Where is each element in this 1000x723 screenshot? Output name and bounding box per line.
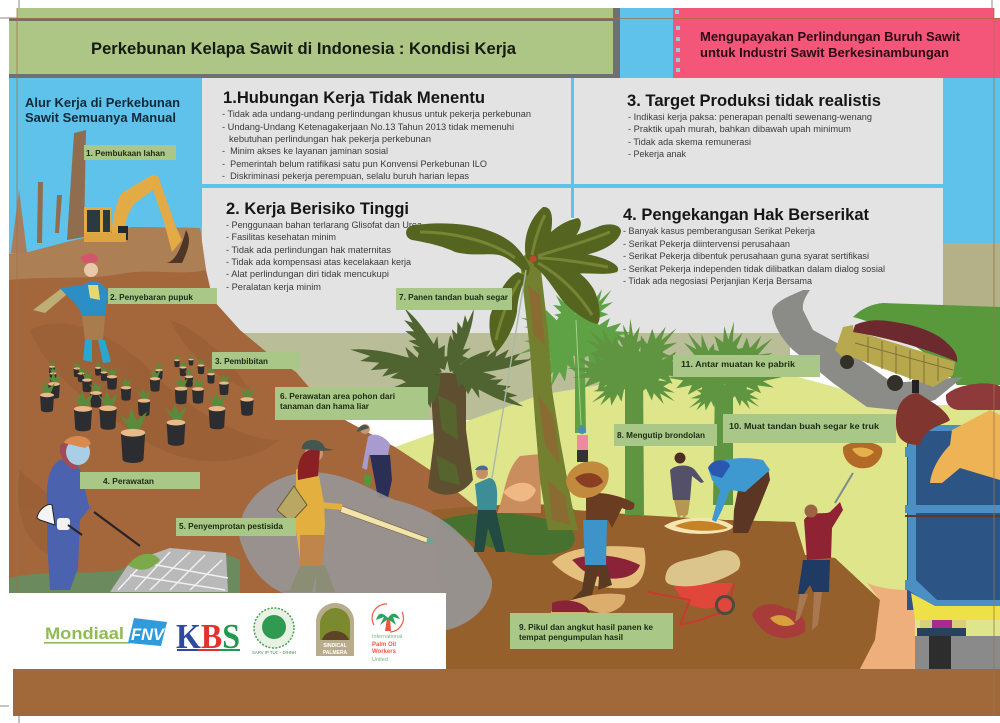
logo: union emblem: SARV IP TUC - DIHNH [252,650,296,655]
road [772,290,963,410]
label 11: 11. Antar muatan ke pabrik [681,360,796,369]
logo: Sindical Palmera: SINDICAL [323,643,347,649]
logos panel [9,593,446,669]
panel 3: target produksi: - Tidak ada skema remunerasi [628,137,751,148]
header: pink subtitle band [673,8,1000,78]
palm: green tree 3 [565,314,697,515]
logo: IPOWU: Workers [372,649,397,655]
undergrowth [436,513,575,555]
panel 4: hak berserikat: - Banyak kasus pemberangusan Serikat Pekerja [623,226,816,237]
bottom left grass [9,552,240,593]
yellow green field [395,372,1000,640]
tree trunks in cleared land [11,130,86,253]
worker 9: porter with fruit [566,461,634,600]
panel 1: hubungan kerja: - Tidak ada undang-undang perlindungan khusus untuk pekerja perkebunan [222,109,531,120]
panel 1: hubungan kerja: - Minim akses ke layanan jaminan sosial [222,146,388,157]
panel 2: kerja berisiko: - Fasilitas kesehatan minim [226,232,336,243]
panel 4: hak berserikat [623,205,885,287]
label 4 [80,472,200,489]
label 9: tempat pengumpulan hasil [519,633,623,642]
logo: KBS: KBS [176,617,240,656]
label 2 [108,288,217,304]
panel 1: hubungan kerja [222,88,531,182]
blue gap between headers [620,8,673,78]
subtitle: Mengupayakan Perlindungan Buruh Sawit [700,29,961,44]
panel 2: kerja berisiko: - Tidak ada kompensasi atas kecelakaan kerja [226,257,412,268]
worker 6: weeding [357,424,392,498]
logo: IPOWU: Palm Oil [372,642,396,648]
panel 2: kerja berisiko: 2. Kerja Berisiko Tinggi [226,199,409,218]
logo: IPOWU [372,604,403,663]
worker 8b: woman collecting [664,458,770,534]
panel 3: target produksi: - Pekerja anak [628,149,686,160]
label 10 [723,414,896,443]
label 5: 5. Penyemprotan pestisida [179,522,284,531]
label 5 [176,518,296,536]
wheelbarrow with fruit [648,550,740,625]
label 8: 8. Mengutip brondolan [617,431,705,440]
panel 1: hubungan kerja: 1.Hubungan Kerja Tidak Menentu [223,88,485,107]
sky background [9,78,1000,278]
label 2: 2. Penyebaran pupuk [110,293,194,302]
worker 2: fertilizer spreader [33,254,111,363]
label 11 [673,355,820,377]
seedlings in polybags [39,355,255,463]
logo: Sindical Palmera [316,603,354,656]
label 7: 7. Panen tandan buah segar [399,293,508,302]
label 6 [275,387,428,420]
label 8 [614,424,717,446]
excavator [84,175,189,263]
title: Perkebunan Kelapa Sawit di Indonesia : Kondisi Kerja [91,40,517,58]
label 6: tanaman dan hama liar [280,402,369,411]
label 3: 3. Pembibitan [215,357,268,366]
logo: IPOWU: United [372,657,388,663]
bottom brown band [13,669,1000,716]
panel 3: target produksi: 3. Target Produksi tidak realistis [627,91,881,110]
logo: union emblem [252,608,296,655]
panel 4: hak berserikat: - Serikat Pekerja independen tidak dilibatkan dalam dialog sosial [623,264,885,275]
worker 8: child [670,452,704,518]
panel 4: hak berserikat: - Serikat Pekerja dibentuk perusahaan guna syarat sertifikasi [623,251,869,262]
pesticide spray smoke [239,472,492,630]
worker 10: loading worker [795,442,882,630]
label 9: 9. Pikul dan angkut hasil panen ke [519,623,654,632]
white margin left of bottom [0,669,13,723]
panel 3: target produksi: - Indikasi kerja paksa: penerapan penalti sewenang-wenang [628,112,872,123]
khaki right edge [943,243,1000,363]
label 9 [510,613,673,649]
logo: Sindical Palmera: PALMERA [323,650,348,656]
logo: IPOWU: International [372,634,402,640]
panel 2: kerja berisiko: - Penggunaan bahan terlarang Glisofat dan Urea [226,220,423,231]
logo: Mondiaal FNV [44,618,167,646]
palm: tall main tree [406,207,621,530]
brown hillside [9,227,880,669]
panel 2: kerja berisiko [226,199,423,293]
label 7 [396,288,512,310]
soil texture [18,320,280,560]
lower right darker ground [432,504,880,669]
worker 7: harvester with pole [474,270,526,552]
panel 4: hak berserikat: - Serikat Pekerja diintervensi perusahaan [623,239,790,250]
panel 2: kerja berisiko: - Alat perlindungan diri tidak mencukupi [226,269,389,280]
label 1: 1. Pembukaan lahan [86,149,165,158]
label 6: 6. Perawatan area pohon dari [280,392,395,401]
palm: light green behind [513,278,638,433]
panel 1: hubungan kerja: - Pemerintah belum ratifikasi satu pun Konvensi Perkebunan ILO [222,159,487,170]
label 10: 10. Muat tandan buah segar ke truk [729,422,880,431]
fruit pile under porter [551,546,645,613]
label 3 [212,352,300,369]
logo: Mondiaal FNV: FNV [131,625,166,644]
panel 2: kerja berisiko: - Peralatan kerja minim [226,282,321,293]
panel 2: kerja berisiko: - Tidak ada perlindungan hak maternitas [226,245,391,256]
panel 4: hak berserikat: - Tidak ada negosiasi Perjanjian Kerja Bersama [623,276,813,287]
label 4: 4. Perawatan [103,477,154,486]
fruit mound near tall palm [497,454,541,513]
panel 4: hak berserikat: 4. Pengekangan Hak Berserikat [623,205,869,224]
panel 1: hubungan kerja: - Undang-Undang Ketenagakerjaan No.13 Tahun 2013 tidak memenuhi [222,122,514,133]
grey background of text panels [202,78,943,348]
mound of cleared soil [9,227,206,280]
peach ground [860,583,915,669]
fruit pile front [752,604,806,638]
worker 4: pesticide applicator [37,436,140,590]
header: green title band [9,8,620,78]
left heading: Sawit Semuanya Manual [25,111,176,125]
worker 5: sprayer [277,440,434,592]
header: pink subtitle band: untuk Industri Sawit Berkesinambungan [700,45,949,60]
logo: Mondiaal FNV: Mondiaal [45,624,124,643]
panel 3: target produksi: - Praktik upah murah, bahkan dibawah upah minimum [628,124,851,135]
small truck on road [835,320,957,393]
palm: medium dark tree [346,300,534,495]
big truck [896,383,1000,669]
cut fronds pile [110,548,228,592]
palm: green tree 4 [658,318,785,505]
bush [853,303,1000,385]
panel 1: hubungan kerja: kebutuhan perlindungan hak pekerja perkebunan [229,134,431,145]
distant olive band [240,333,790,420]
small distant worker [576,320,588,462]
panel 3: target produksi [627,91,881,160]
label 1 [84,145,176,160]
left heading [25,96,180,125]
panel 1: hubungan kerja: - Diskriminasi pekerja perempuan, selalu buruh harian lepas [222,171,469,182]
left heading: Alur Kerja di Perkebunan [25,96,180,110]
